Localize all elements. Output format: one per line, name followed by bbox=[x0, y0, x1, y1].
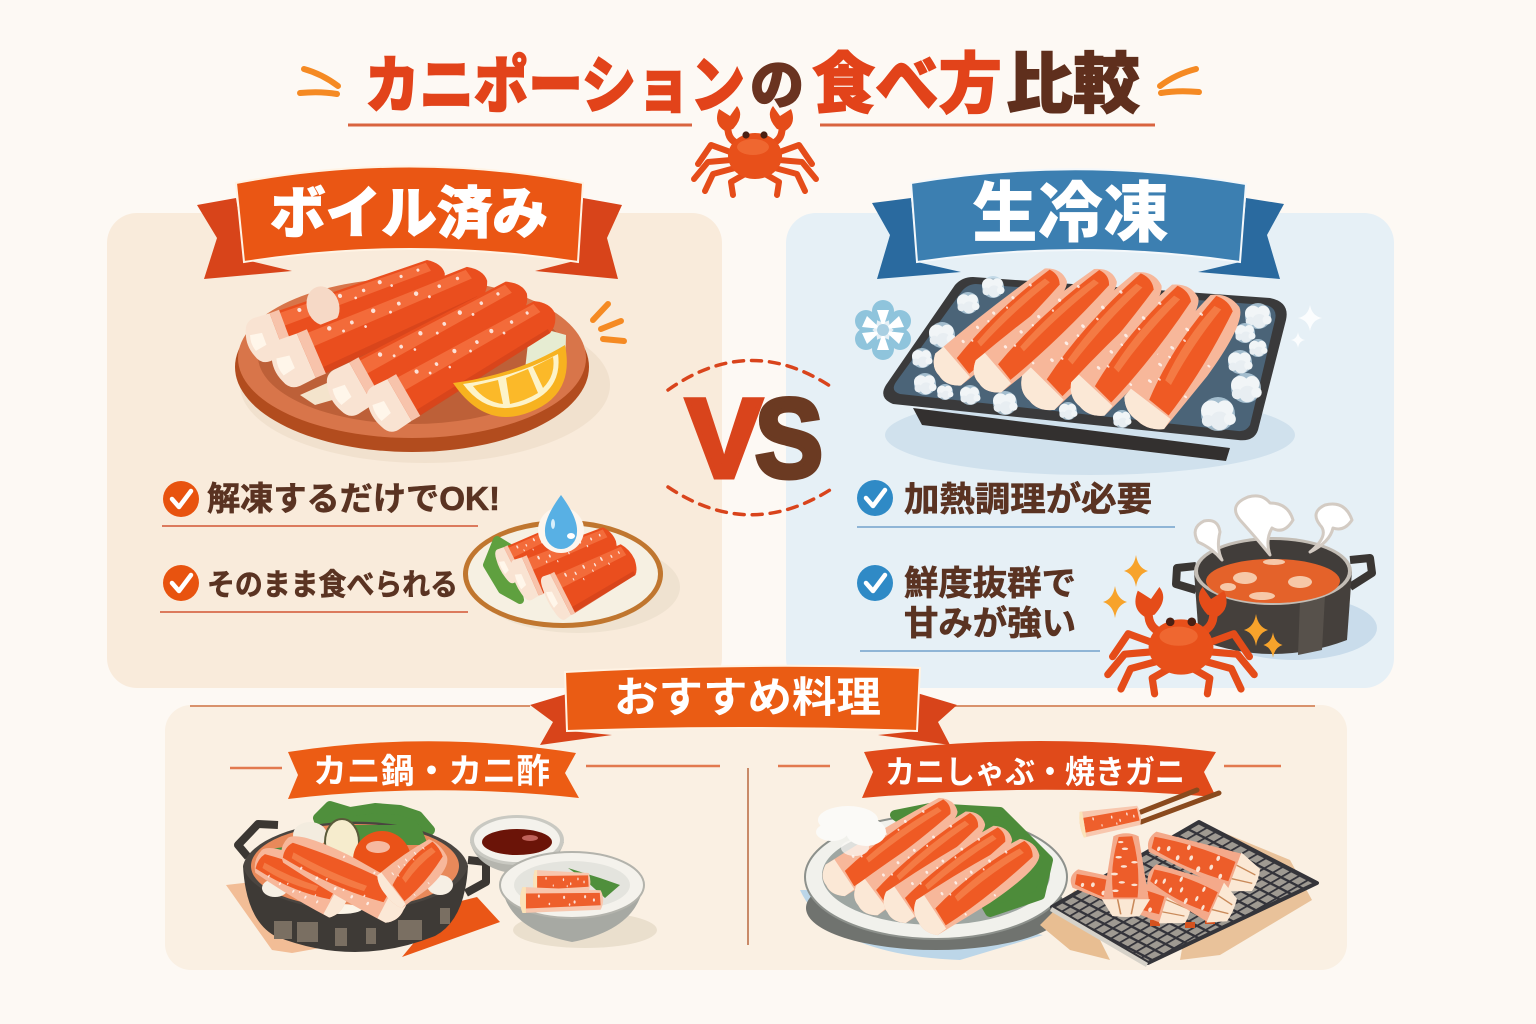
ribbon: crab shabu and grilled crab bbox=[778, 741, 1281, 798]
check item 2: 甘みが強い bbox=[904, 604, 1076, 643]
heading: boiled: ボイル済み bbox=[270, 182, 548, 245]
icon: accent dashes bbox=[593, 304, 624, 341]
lettuce bbox=[487, 540, 520, 600]
glowing coals bbox=[1150, 918, 1215, 928]
check item 1: 解凍するだけでOK! bbox=[207, 480, 500, 517]
greens bbox=[318, 806, 430, 850]
title underline bbox=[348, 124, 1155, 126]
check item 2: 鮮度抜群で bbox=[904, 565, 1076, 603]
check item 2 bbox=[160, 565, 468, 612]
checklist: boiled bbox=[160, 480, 500, 612]
icon: crab beside pot bbox=[1108, 587, 1254, 694]
checklist: frozen bbox=[857, 480, 1175, 651]
title bbox=[300, 47, 1199, 125]
steam bbox=[1195, 496, 1352, 560]
lemon wedge bbox=[453, 345, 567, 417]
illustration: crab shabu plate bbox=[800, 791, 1067, 960]
VS text: S bbox=[755, 376, 823, 501]
ice chunks bbox=[912, 276, 1272, 431]
icon: snowflake bbox=[855, 300, 911, 360]
icon: gold sparkles bbox=[1103, 555, 1283, 658]
illustration: crab hot pot bbox=[226, 806, 500, 957]
illustration: hot pot bbox=[1176, 496, 1377, 660]
sub heading: crab shabu: カニしゃぶ・焼きガニ bbox=[885, 754, 1185, 790]
illustration: dipping sauce bowl bbox=[470, 815, 564, 874]
panel: boiled bbox=[107, 213, 722, 688]
greens over rim bbox=[330, 825, 428, 845]
pot handles bbox=[238, 824, 486, 893]
check item 1 bbox=[162, 480, 500, 526]
steam bbox=[816, 806, 886, 856]
illustration: thawed crab plate bbox=[463, 513, 680, 633]
check item 2: そのまま食べられる bbox=[207, 569, 458, 602]
check item 1 bbox=[857, 480, 1175, 527]
heading: recommended dishes: おすすめ料理 bbox=[614, 674, 881, 721]
icon: water drop bbox=[538, 495, 584, 553]
ingredients bbox=[262, 819, 453, 914]
illustration: side dish bowl bbox=[500, 852, 657, 948]
icon: sparkles bbox=[1291, 305, 1322, 348]
ribbon: crab hot pot and vinegared crab bbox=[230, 741, 720, 799]
pot body bbox=[243, 866, 468, 952]
title text: カニポーション bbox=[365, 52, 745, 121]
illustration: grilled crab bbox=[1040, 790, 1317, 967]
VS badge bbox=[668, 360, 833, 515]
title accent right bbox=[1160, 69, 1199, 93]
illustration: boiled crab on plate bbox=[235, 250, 610, 463]
illustration: frozen crab on ice tray bbox=[883, 260, 1295, 475]
chopsticks bbox=[1141, 790, 1219, 822]
cloth bbox=[226, 882, 320, 953]
sub heading: crab hot pot: カニ鍋・カニ酢 bbox=[313, 753, 550, 791]
VS text: V bbox=[686, 376, 762, 501]
ribbon: frozen bbox=[872, 169, 1284, 279]
title text: の bbox=[750, 56, 804, 116]
title text: 比較 bbox=[1006, 47, 1140, 121]
divider bbox=[747, 768, 749, 945]
VS text bbox=[686, 376, 823, 501]
pot handles bbox=[1176, 558, 1372, 590]
ribbon: recommended dishes bbox=[190, 666, 1315, 745]
check item 2 bbox=[857, 565, 1100, 651]
soup bbox=[1206, 559, 1340, 603]
icon: crab bbox=[694, 106, 816, 195]
title text bbox=[365, 47, 1140, 121]
grill bbox=[1050, 822, 1317, 967]
heading: frozen: 生冷凍 bbox=[972, 176, 1169, 250]
VS dashed arcs bbox=[668, 360, 833, 515]
panel: frozen bbox=[786, 213, 1394, 688]
title accent left bbox=[300, 69, 338, 94]
ribbon: boiled bbox=[197, 166, 622, 279]
check item 1: 加熱調理が必要 bbox=[904, 480, 1152, 519]
panel: recommended dishes bbox=[165, 705, 1347, 970]
title text: 食べ方 bbox=[812, 47, 1002, 121]
